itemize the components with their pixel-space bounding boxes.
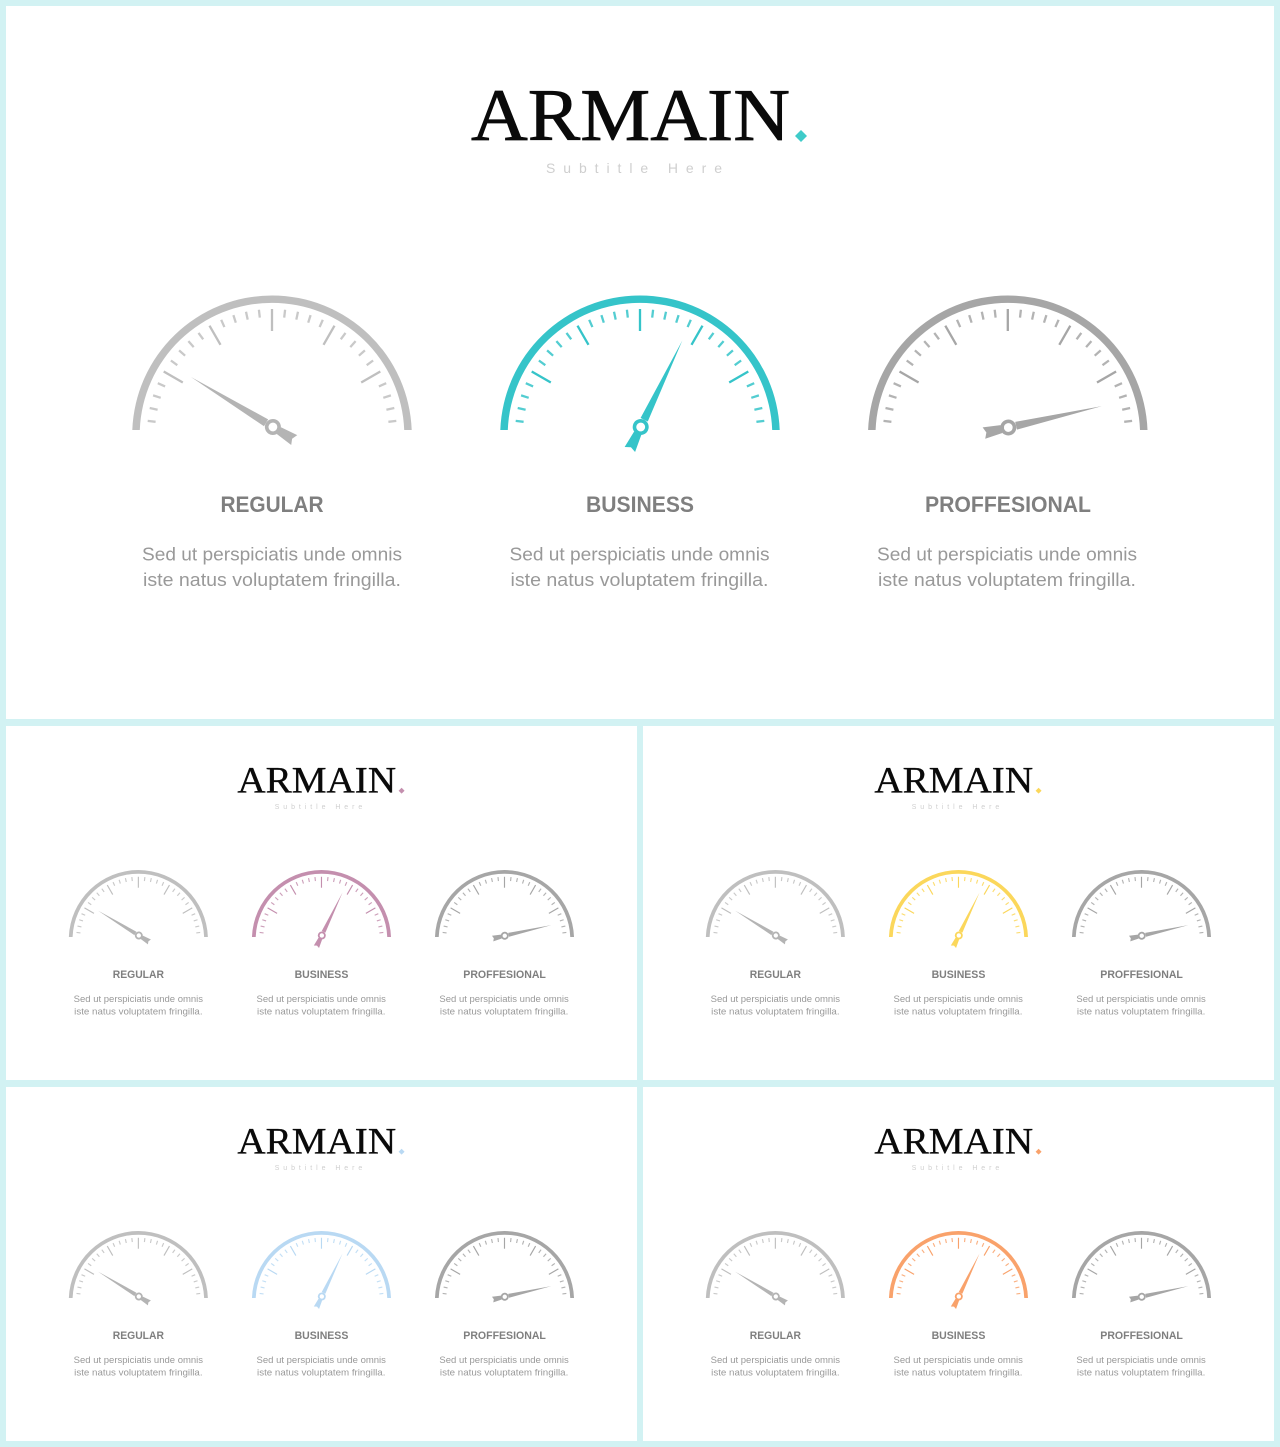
icon: title accent diamond [795, 130, 807, 142]
text block: regular: iste natus voluptatem fringilla. [143, 570, 401, 590]
text block: business: Sed ut perspiciatis unde omnis [257, 1355, 386, 1365]
subtitle: Subtitle Here [912, 1165, 999, 1172]
text block: business: iste natus voluptatem fringilla. [257, 1007, 385, 1017]
text block: proffesional: iste natus voluptatem fringilla. [1077, 1007, 1205, 1017]
text block: regular: Sed ut perspiciatis unde omnis [711, 994, 841, 1004]
panel: blue slide [6, 1087, 637, 1441]
gauge: business [252, 1231, 391, 1309]
text block: regular: Sed ut perspiciatis unde omnis [74, 1355, 204, 1365]
title: ARMAIN [237, 1121, 396, 1162]
heading: proffesional: PROFFESIONAL [925, 492, 1091, 517]
heading: business: BUSINESS [295, 1330, 348, 1342]
text block: regular: Sed ut perspiciatis unde omnis [142, 544, 402, 564]
panel: main slide teal [6, 6, 1274, 719]
panel: yellow slide [643, 726, 1274, 1080]
gauge: business [889, 1231, 1028, 1309]
heading: proffesional: PROFFESIONAL [463, 969, 546, 981]
gauge: proffesional [435, 870, 574, 942]
text block: proffesional: Sed ut perspiciatis unde omnis [1076, 994, 1206, 1004]
text block: regular [711, 994, 841, 1017]
subtitle: Subtitle Here [912, 804, 999, 811]
text block: proffesional [439, 994, 569, 1017]
subtitle: Subtitle Here [275, 804, 362, 811]
text block: business [894, 994, 1023, 1017]
heading: regular: REGULAR [750, 969, 801, 981]
gauge: proffesional [1072, 870, 1211, 942]
text block: business: iste natus voluptatem fringilla. [510, 570, 768, 590]
text block: business: Sed ut perspiciatis unde omnis [510, 544, 770, 564]
heading: regular: REGULAR [113, 969, 164, 981]
text block: proffesional: Sed ut perspiciatis unde omnis [877, 544, 1137, 564]
text block: business: iste natus voluptatem fringilla. [257, 1368, 385, 1378]
gauge: proffesional [868, 295, 1148, 439]
text block: proffesional: Sed ut perspiciatis unde omnis [1076, 1355, 1206, 1365]
text block: business [510, 544, 770, 590]
text block: regular: iste natus voluptatem fringilla. [74, 1007, 203, 1017]
gauge: regular [69, 870, 208, 945]
text block: regular: iste natus voluptatem fringilla. [74, 1368, 203, 1378]
gauge: regular [706, 1231, 845, 1306]
text block: proffesional [1076, 1355, 1206, 1378]
text block: business: Sed ut perspiciatis unde omnis [894, 1355, 1023, 1365]
text block: proffesional: iste natus voluptatem fringilla. [440, 1368, 568, 1378]
title: ARMAIN [237, 760, 396, 801]
icon: title accent diamond [399, 788, 405, 794]
subtitle: Subtitle Here [275, 1165, 362, 1172]
title: ARMAIN [471, 75, 790, 157]
gauge: regular [69, 1231, 208, 1306]
text block: proffesional: iste natus voluptatem fringilla. [440, 1007, 568, 1017]
icon: title accent diamond [1036, 788, 1042, 794]
text block: proffesional [1076, 994, 1206, 1017]
heading: proffesional: PROFFESIONAL [1100, 969, 1183, 981]
text block: business: Sed ut perspiciatis unde omnis [257, 994, 386, 1004]
text block: regular [74, 1355, 204, 1378]
text block: proffesional: iste natus voluptatem fringilla. [1077, 1368, 1205, 1378]
heading: business: BUSINESS [586, 492, 694, 517]
gauge: proffesional [1072, 1231, 1211, 1303]
text block: regular: iste natus voluptatem fringilla. [711, 1368, 840, 1378]
text block: business: iste natus voluptatem fringilla. [894, 1368, 1022, 1378]
heading: regular: REGULAR [750, 1330, 801, 1342]
gauge: business [500, 295, 780, 452]
heading: business: BUSINESS [932, 1330, 985, 1342]
text block: regular [142, 544, 402, 590]
text block: proffesional: iste natus voluptatem fringilla. [878, 570, 1136, 590]
text block: business [257, 1355, 386, 1378]
text block: business [894, 1355, 1023, 1378]
text block: business [257, 994, 386, 1017]
text block: regular: iste natus voluptatem fringilla. [711, 1007, 840, 1017]
gauge: proffesional [435, 1231, 574, 1303]
title: ARMAIN [874, 760, 1033, 801]
text block: proffesional [877, 544, 1137, 590]
gauge: business [889, 870, 1028, 948]
icon: title accent diamond [1036, 1149, 1042, 1155]
heading: proffesional: PROFFESIONAL [463, 1330, 546, 1342]
title: ARMAIN [874, 1121, 1033, 1162]
text block: regular [711, 1355, 841, 1378]
text block: business: Sed ut perspiciatis unde omnis [894, 994, 1023, 1004]
panel: pink slide [6, 726, 637, 1080]
text block: proffesional [439, 1355, 569, 1378]
text block: regular [74, 994, 204, 1017]
text block: regular: Sed ut perspiciatis unde omnis [711, 1355, 841, 1365]
heading: proffesional: PROFFESIONAL [1100, 1330, 1183, 1342]
heading: business: BUSINESS [295, 969, 348, 981]
text block: proffesional: Sed ut perspiciatis unde omnis [439, 1355, 569, 1365]
text block: proffesional: Sed ut perspiciatis unde omnis [439, 994, 569, 1004]
text block: business: iste natus voluptatem fringilla. [894, 1007, 1022, 1017]
icon: title accent diamond [399, 1149, 405, 1155]
gauge: business [252, 870, 391, 948]
text block: regular: Sed ut perspiciatis unde omnis [74, 994, 204, 1004]
gauge: regular [132, 295, 412, 445]
gauge: regular [706, 870, 845, 945]
heading: business: BUSINESS [932, 969, 985, 981]
subtitle: Subtitle Here [546, 160, 722, 176]
panel: orange slide [643, 1087, 1274, 1441]
heading: regular: REGULAR [113, 1330, 164, 1342]
heading: regular: REGULAR [220, 492, 324, 517]
